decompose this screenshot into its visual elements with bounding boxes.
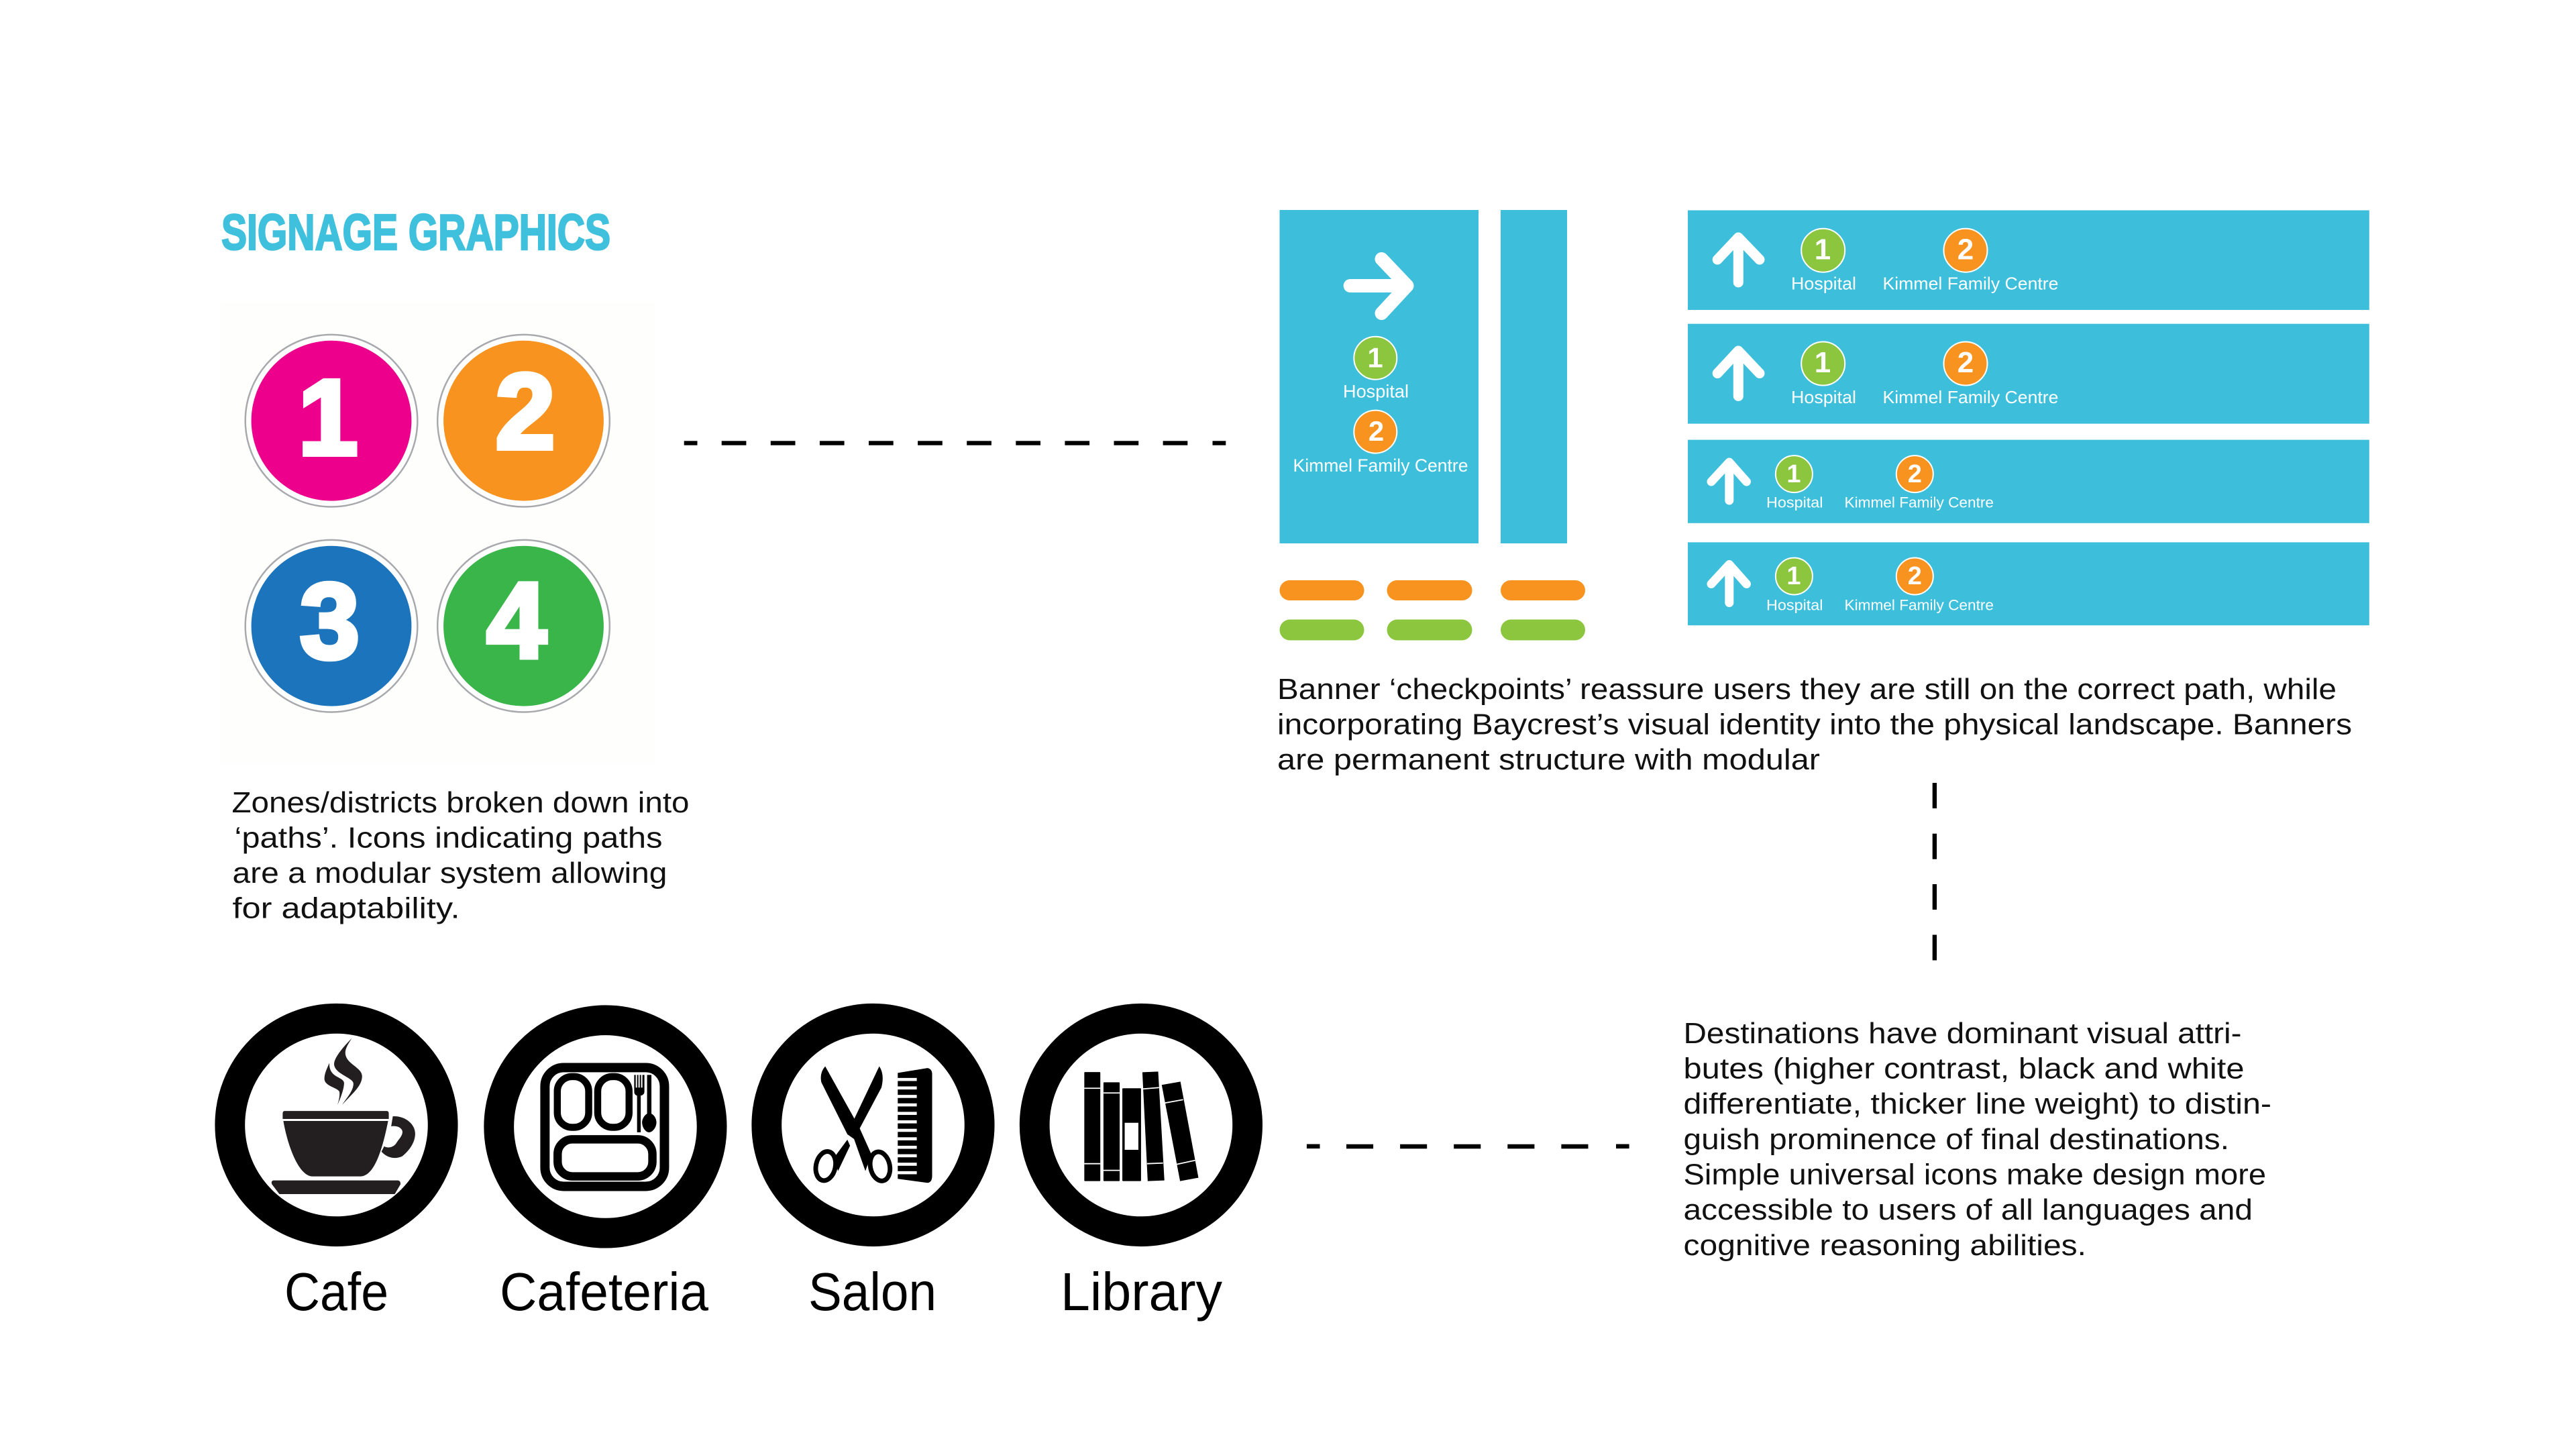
text block: destinations description: butes (higher contrast, black and white (1684, 1053, 2245, 1085)
icon: zone 1 (246, 335, 417, 507)
text block: banner description: Banner ‘checkpoints’ reassure users they are still on the correct path, while (1277, 673, 2337, 706)
icon: path 1 badge (1354, 337, 1397, 380)
text block: zones description: ‘paths’. Icons indicating paths (235, 821, 663, 855)
tray (545, 1067, 664, 1187)
text block: banner description: incorporating Baycrest’s visual identity into the physical landscape. Banners (1277, 708, 2352, 741)
icon: path 1 badge: 1 (1815, 233, 1831, 266)
label: Cafeteria: Cafeteria (500, 1262, 708, 1322)
icon: path 2 badge: 2 (1908, 562, 1922, 590)
panel: vertical banner (1280, 210, 1479, 543)
modular colour strips (1280, 580, 1585, 640)
icon: zone 2 (437, 335, 610, 507)
icon: path 2 badge: 2 (1368, 415, 1384, 447)
labels (1791, 274, 2058, 294)
labels: Hospital (1791, 387, 1856, 407)
icon: zone 3 (246, 540, 417, 712)
labels (1766, 494, 1994, 511)
labels: Kimmel Family Centre (1882, 387, 2058, 407)
labels (1791, 387, 2058, 407)
icon: right arrow (1350, 259, 1407, 313)
text block: destinations description: Simple universal icons make design more (1684, 1159, 2266, 1191)
panel: zone number icons (221, 302, 655, 763)
icon: path 2 badge: 2 (1957, 346, 1974, 379)
label: Hospital: Hospital (1343, 382, 1409, 402)
icon: zone 2: 2 (496, 352, 555, 471)
connector: zones to banners (684, 441, 1226, 445)
icon: up arrow (1717, 237, 1760, 282)
icon: zone 3: 3 (300, 561, 360, 681)
text block: destinations description: Destinations have dominant visual attri- (1684, 1017, 2242, 1050)
label: Kimmel Family Centre: Kimmel Family Centre (1293, 455, 1468, 476)
text block: destinations description: guish prominence of final destinations. (1684, 1123, 2229, 1156)
label: Salon: Salon (808, 1262, 936, 1322)
text block: destinations description (1684, 1017, 2271, 1262)
text block: destinations description: differentiate, thicker line weight) to distin- (1684, 1087, 2271, 1120)
steam (325, 1038, 362, 1105)
icon: library (1034, 1018, 1248, 1232)
text block: banner description (1277, 673, 2352, 776)
icon: zone 4: 4 (487, 560, 547, 680)
icon: path 2 badge (1896, 558, 1933, 594)
icon: path 1 badge (1801, 342, 1845, 385)
text block: banner description: are permanent structure with modular (1277, 743, 1820, 776)
icon: path 2 badge (1354, 411, 1397, 453)
connector: icons to description (1307, 1144, 1629, 1148)
icon: zone 1: 1 (299, 357, 358, 478)
icon: path 2 badge: 2 (1908, 460, 1922, 488)
cup (282, 1111, 415, 1177)
panel: narrow blank banner (1501, 210, 1567, 543)
labels: Hospital (1791, 274, 1856, 294)
label: Library: Library (1061, 1262, 1222, 1322)
icon: up arrow (1711, 462, 1747, 500)
label: Cafe: Cafe (284, 1262, 388, 1322)
labels: Kimmel Family Centre (1845, 494, 1994, 511)
panel: horizontal banner 4 (1688, 542, 2369, 625)
icon: path 2 badge (1896, 455, 1933, 492)
icon: path 1 badge: 1 (1786, 562, 1801, 590)
icon: path 2 badge (1944, 229, 1987, 272)
icon: path 1 badge (1776, 455, 1813, 492)
panel: horizontal banner 2 (1688, 324, 2369, 424)
panel: horizontal banner 1 (1688, 211, 2369, 310)
labels: Kimmel Family Centre (1845, 596, 1994, 613)
icon: path 1 badge (1801, 229, 1845, 272)
saucer (272, 1181, 400, 1194)
books (1084, 1071, 1198, 1181)
icon: path 1 badge (1776, 558, 1813, 594)
text block: zones description (232, 786, 690, 924)
icon: path 1 badge: 1 (1367, 342, 1383, 373)
text block: destinations description: accessible to users of all languages and (1684, 1193, 2253, 1226)
icon: cafe (230, 1018, 443, 1232)
labels: Kimmel Family Centre (1882, 274, 2058, 294)
icon: path 2 badge (1944, 342, 1987, 385)
icon: path 1 badge: 1 (1815, 346, 1831, 379)
labels (1766, 596, 1994, 613)
title: SIGNAGE GRAPHICS (221, 204, 610, 260)
icon: salon (767, 1018, 979, 1232)
fork (634, 1075, 645, 1132)
icon: path 1 badge: 1 (1786, 460, 1801, 488)
text block: zones description: are a modular system allowing (232, 857, 667, 890)
icon: path 2 badge: 2 (1957, 233, 1974, 266)
panel: horizontal banner 3 (1688, 440, 2369, 523)
icon: zone 4 (437, 540, 610, 712)
icon: up arrow (1711, 565, 1747, 602)
scissors (813, 1066, 893, 1183)
text block: destinations description: cognitive reasoning abilities. (1684, 1229, 2086, 1262)
text block: zones description: Zones/districts broken down into (232, 786, 690, 819)
comb (897, 1068, 932, 1183)
icon: cafeteria (499, 1020, 712, 1233)
labels: Hospital (1766, 596, 1823, 613)
connector: banners to destinations (1933, 783, 1937, 961)
labels: Hospital (1766, 494, 1823, 511)
icon: up arrow (1717, 351, 1760, 396)
text block: zones description: for adaptability. (232, 892, 460, 924)
spoon (642, 1075, 657, 1132)
